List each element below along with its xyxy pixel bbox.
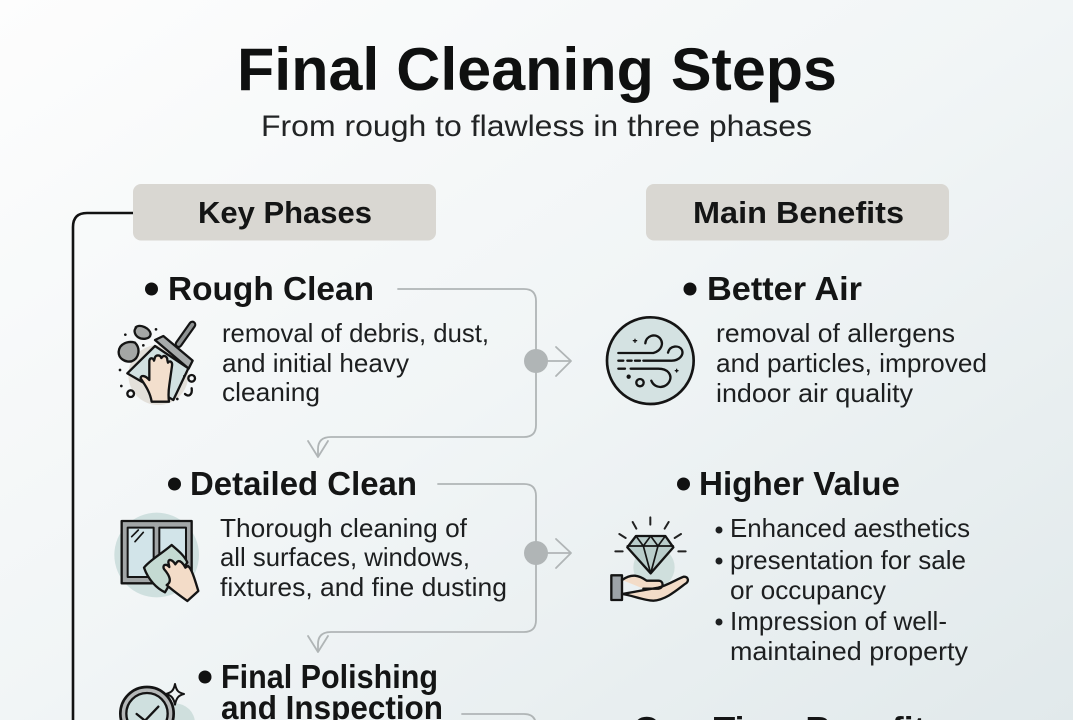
phase 3: Final Polishing and Inspection	[198, 658, 443, 720]
benefit 2 list: Impression of well-	[730, 606, 947, 636]
benefit 2 list: maintained property	[730, 636, 968, 666]
phase 2 description: fixtures, and fine dusting	[220, 572, 507, 602]
phase 1: Rough Clean: Rough Clean	[168, 270, 374, 307]
phase 1 description: and initial heavy	[222, 348, 409, 378]
subtitle: From rough to flawless in three phases	[261, 110, 812, 143]
title: Final Cleaning Steps	[237, 36, 837, 103]
benefit 2 list: or occupancy	[730, 575, 886, 605]
panel header: Main Benefits: Main Benefits	[693, 195, 904, 230]
connector: phase 3	[462, 714, 536, 720]
icon: squeegee and hand	[119, 325, 195, 405]
benefit 2: Higher Value	[677, 465, 970, 666]
benefit 1: Better Air: Better Air	[707, 270, 862, 307]
icon: diamond on hand	[611, 517, 688, 601]
benefit 1 description: removal of allergens	[716, 318, 955, 348]
panel header: Key Phases: Key Phases	[198, 195, 372, 230]
phase 1: Rough Clean	[145, 270, 489, 407]
phase 2 description	[220, 513, 507, 602]
phase 1 description	[222, 318, 489, 407]
panel header: Key Phases	[133, 184, 436, 240]
icon: air flow	[607, 317, 694, 404]
phase 1 description: cleaning	[222, 377, 320, 407]
benefit 1 description: indoor air quality	[716, 378, 913, 408]
benefit 2 list	[716, 513, 970, 666]
timeline connector: black rail	[73, 213, 133, 720]
benefit 2 list: presentation for sale	[730, 545, 966, 575]
icon: inspection check badge	[120, 684, 195, 720]
benefit 1 description: and particles, improved	[716, 348, 987, 378]
connector: phase 2 to benefit and next phase	[308, 484, 571, 652]
phase 2: Detailed Clean: Detailed Clean	[190, 465, 417, 502]
panel header: Main Benefits	[646, 184, 949, 240]
phase 2 description: all surfaces, windows,	[220, 542, 470, 572]
phase 2: Detailed Clean	[168, 465, 507, 602]
phase 3: Final Polishing and Inspection: Final Polishing	[221, 658, 438, 695]
icon: window and cloth	[114, 513, 199, 601]
phase 1 description: removal of debris, dust,	[222, 318, 489, 348]
phase 2 description: Thorough cleaning of	[220, 513, 468, 543]
benefit 1 description	[716, 318, 987, 408]
benefit 2 list: Enhanced aesthetics	[730, 513, 970, 543]
benefit 2: Higher Value: Higher Value	[699, 465, 900, 502]
connector: phase 1 to benefit and next phase	[308, 289, 571, 457]
benefit 1: Better Air	[684, 270, 987, 408]
